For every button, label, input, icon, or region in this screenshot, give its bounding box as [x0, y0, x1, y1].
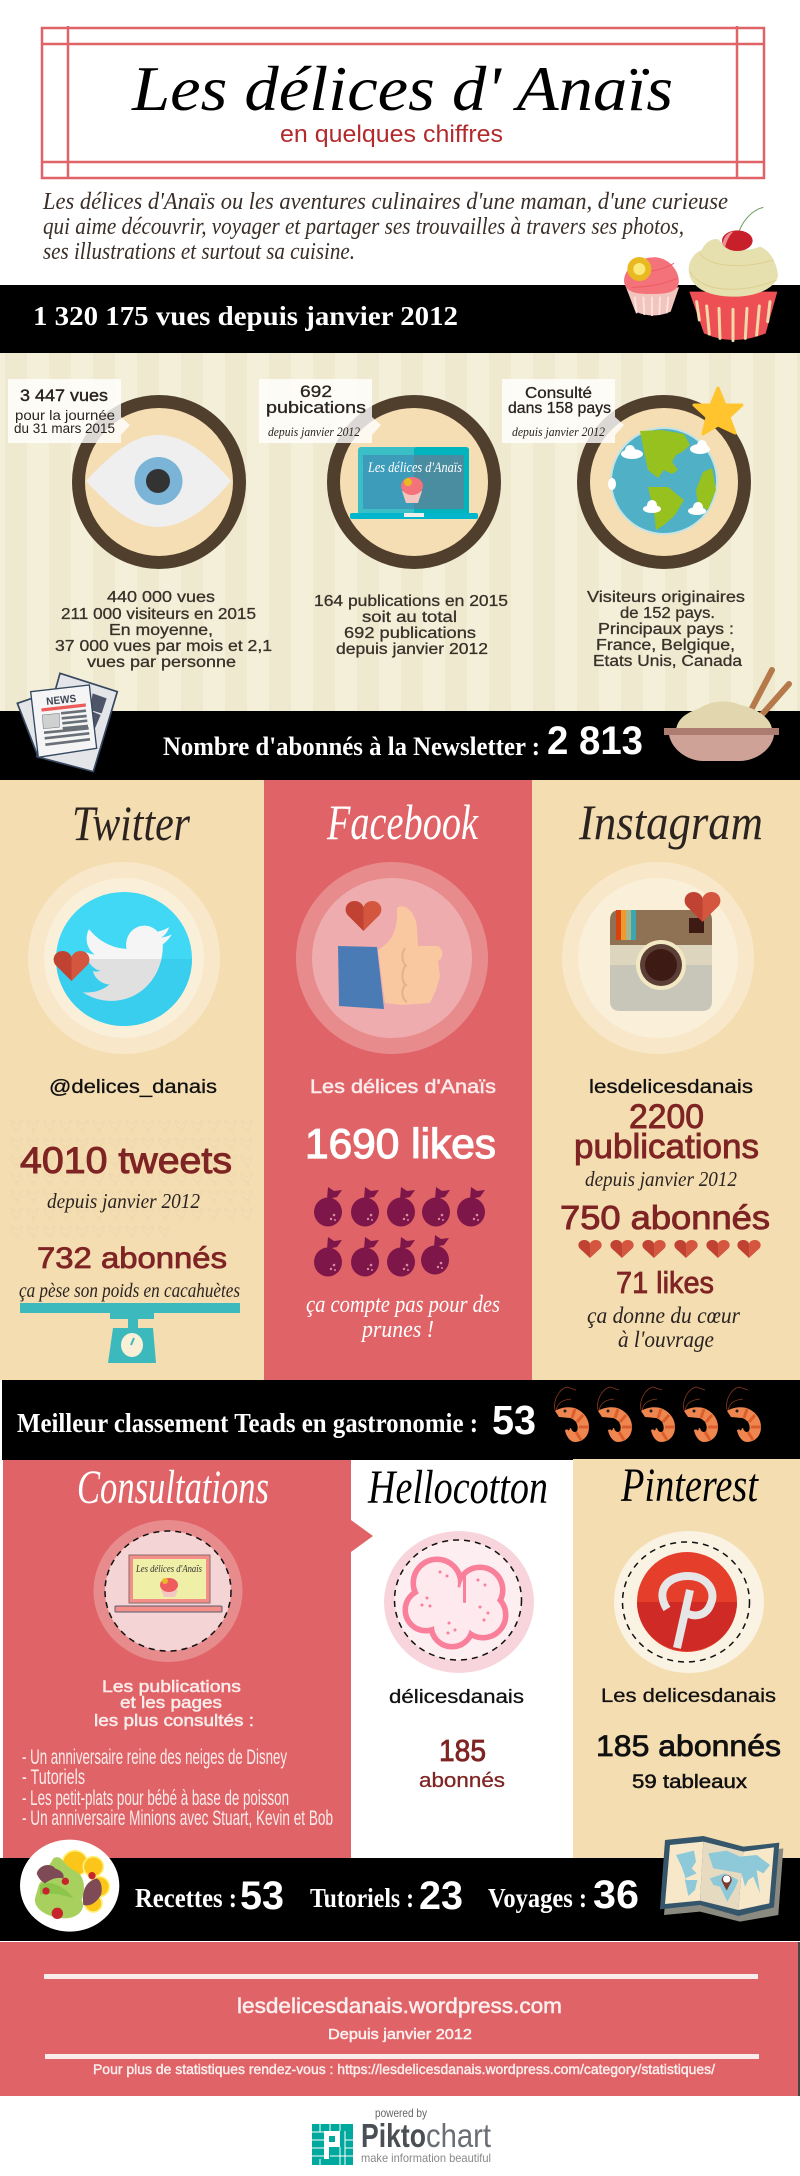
panel: Twitter — [0, 780, 264, 1380]
list: most viewed — [22, 1746, 333, 1830]
text: views details: vues par personne — [87, 654, 236, 671]
panel: key stats — [0, 353, 800, 711]
title frame — [42, 26, 764, 178]
category: recipes: 53 — [240, 1874, 284, 1918]
text: countries details: Etats Unis, Canada — [593, 653, 742, 670]
caption: plums: prunes ! — [360, 1317, 434, 1343]
credit: Piktochart: make information beautiful — [361, 2151, 491, 2165]
icon: newspapers — [17, 673, 117, 772]
note: since january: depuis janvier 2012 — [47, 1189, 200, 1213]
icon: salad plate — [20, 1840, 119, 1932]
panel: Instagram — [532, 780, 800, 1380]
newsletter label: Nombre d'abonnés à la Newsletter : — [163, 732, 540, 761]
icon: rice bowl — [664, 670, 789, 761]
stat: likes: 1690 likes — [305, 1120, 496, 1167]
intro text: ses illustrations et surtout sa cuisine. — [43, 239, 355, 265]
text: publications details — [314, 593, 508, 658]
text: views details: 211 000 visiteurs en 2015 — [61, 606, 256, 623]
label: daily views: pour la journée — [15, 407, 115, 423]
ranking label: Meilleur classement Teads en gastronomie : — [17, 1408, 478, 1438]
category: travel — [488, 1873, 639, 1917]
category: travel: Voyages : — [488, 1883, 587, 1913]
caption: peanuts: ça pèse son poids en cacahuètes — [19, 1280, 240, 1302]
pattern: chickens — [8, 1117, 253, 1240]
text: views details: En moyenne, — [109, 622, 213, 639]
stat: 185: 185 — [439, 1733, 486, 1768]
account name: Les delicesdanais — [601, 1686, 776, 1707]
caption: heart: à l'ouvrage — [618, 1327, 714, 1352]
list: most viewed: - Les petit-plats pour bébé à base de poisson — [22, 1787, 289, 1810]
icon: cotton flower — [384, 1531, 534, 1673]
list: most viewed: - Un anniversaire Minions avec Stuart, Kevin et Bob — [22, 1807, 333, 1830]
stat: followers: 732 abonnés — [37, 1242, 227, 1275]
heading: Twitter — [72, 795, 190, 851]
panel: Hellocotton — [367, 1461, 548, 1792]
text: views details: 440 000 vues — [107, 589, 215, 606]
caption: plums — [306, 1292, 500, 1343]
text: views details: 37 000 vues par mois et 2,1 — [55, 638, 272, 655]
subheading: les plus consultés : — [94, 1711, 254, 1730]
heading: Instagram — [578, 794, 763, 850]
since: Depuis janvier 2012 — [328, 2026, 472, 2043]
subtitle: en quelques chiffres — [280, 121, 503, 148]
link: Pour plus de statistiques rendez-vous : https://lesdelicesdanais.wordpress.com/category/statistiques/ — [93, 2061, 715, 2077]
circle: views eye — [78, 402, 240, 562]
text: countries details: France, Belgique, — [596, 637, 735, 654]
caption: plums: ça compte pas pour des — [306, 1292, 500, 1318]
panel: footer — [0, 1942, 800, 2096]
views heading: 1 320 175 vues depuis janvier 2012 — [33, 301, 458, 331]
text: publications details: depuis janvier 2012 — [336, 641, 488, 658]
icon: twitter bird — [28, 862, 220, 1054]
intro text: Les délices d'Anaïs ou les aventures culinaires d'une maman, d'une curieuse — [42, 189, 728, 215]
stat: publications: publications — [574, 1128, 759, 1166]
caption: heart — [587, 1303, 741, 1352]
credit: Piktochart: Pikto — [361, 2117, 426, 2154]
credit: Piktochart: powered by — [375, 2106, 427, 2120]
label: publications: 692 — [300, 382, 332, 401]
stat: boards: 59 tableaux — [632, 1772, 748, 1793]
icons: plums — [314, 1187, 485, 1276]
category: recipes: Recettes : — [135, 1883, 237, 1913]
caption: heart: ça donne du cœur — [587, 1303, 741, 1328]
banner: categories — [0, 1858, 800, 1941]
icons: hearts — [578, 1240, 761, 1258]
icon: thumbs up — [296, 862, 488, 1054]
ranking number: 53 — [492, 1397, 536, 1443]
heading: Consultations — [77, 1461, 269, 1514]
label: countries: dans 158 pays — [508, 400, 611, 417]
stat: tweets: 4010 tweets — [20, 1140, 232, 1181]
title: Les délices d' Anaïs — [131, 53, 673, 124]
icon: Piktochart logo — [312, 2124, 353, 2165]
text: countries details — [587, 589, 745, 670]
icon: laptop — [94, 1520, 242, 1662]
blog address: lesdelicesdanais.wordpress.com — [237, 1995, 562, 2018]
stat: likes: 71 likes — [616, 1265, 714, 1300]
label: daily views — [8, 379, 130, 443]
panel: Facebook — [264, 780, 532, 1380]
list: most viewed: - Un anniversaire reine des neiges de Disney — [22, 1746, 287, 1769]
category: travel: 36 — [593, 1873, 639, 1917]
banner: newsletter — [0, 711, 800, 780]
account name: lesdelicesdanais — [589, 1077, 753, 1098]
banner: total views — [0, 285, 800, 353]
panel: Consultations — [3, 1460, 373, 1858]
circle: publications laptop: Les délices d'Anaïs — [367, 460, 462, 476]
icon: cupcakes — [624, 207, 778, 341]
icon: newspapers: NEWS — [46, 693, 77, 708]
note: since january: depuis janvier 2012 — [585, 1167, 737, 1191]
heading: Pinterest — [620, 1459, 759, 1512]
stat label: abonnés — [419, 1770, 505, 1792]
list: most viewed: - Tutoriels — [22, 1766, 85, 1789]
circle: publications laptop — [334, 402, 494, 562]
stat: followers: 750 abonnés — [560, 1199, 770, 1236]
text: countries details: de 152 pays. — [620, 605, 715, 622]
account name: délicesdanais — [389, 1687, 524, 1708]
category: tutorials: 23 — [419, 1874, 463, 1918]
icons: shrimps — [555, 1387, 761, 1442]
text: publications details: 164 publications en 2015 — [314, 593, 508, 610]
label: publications — [259, 379, 381, 443]
label: daily views: 3 447 vues — [20, 386, 108, 405]
heading: Facebook — [326, 794, 479, 850]
text: countries details: Visiteurs originaires — [587, 589, 745, 606]
circle: globe — [584, 402, 744, 562]
category: recipes — [135, 1874, 284, 1918]
banner: Teads ranking — [2, 1380, 800, 1460]
subheading — [94, 1677, 254, 1730]
icon: world map — [660, 1836, 783, 1922]
intro text — [42, 189, 728, 265]
icon: star — [694, 388, 742, 434]
text: publications details: 692 publications — [344, 625, 476, 642]
heading: Hellocotton — [367, 1461, 548, 1514]
text: publications details: soit au total — [362, 609, 457, 626]
stat: publications: 2200 — [629, 1098, 704, 1136]
icon: scale — [20, 1303, 240, 1363]
stat: publications — [574, 1098, 759, 1166]
label: publications: depuis janvier 2012 — [268, 424, 360, 439]
icon: camera — [562, 862, 754, 1054]
handle: @delices_danais — [49, 1077, 217, 1098]
label: publications: pubications — [266, 398, 366, 417]
subheading: et les pages — [120, 1693, 222, 1712]
subheading: Les publications — [102, 1677, 241, 1696]
text: views details — [55, 589, 272, 671]
category: tutorials: Tutoriels : — [310, 1883, 414, 1913]
credit: Piktochart: chart — [426, 2117, 491, 2154]
page name: Les délices d'Anaïs — [310, 1077, 496, 1098]
label: countries: Consulté — [525, 385, 592, 402]
icon: Pinterest logo — [614, 1531, 764, 1673]
label: countries: depuis janvier 2012 — [512, 424, 605, 439]
text: countries details: Principaux pays : — [598, 621, 734, 638]
stat: followers: 185 abonnés — [596, 1730, 781, 1763]
label: daily views: du 31 mars 2015 — [14, 420, 115, 436]
panel: Pinterest — [573, 1459, 800, 1858]
category: tutorials — [310, 1874, 463, 1918]
intro text: qui aime découvrir, voyager et partager ses trouvailles à travers ses photos, — [43, 214, 684, 240]
icon: laptop: Les délices d'Anaïs — [135, 1564, 202, 1575]
label: countries — [502, 379, 624, 443]
credit: Piktochart — [312, 2106, 491, 2165]
newsletter number: 2 813 — [547, 719, 643, 763]
